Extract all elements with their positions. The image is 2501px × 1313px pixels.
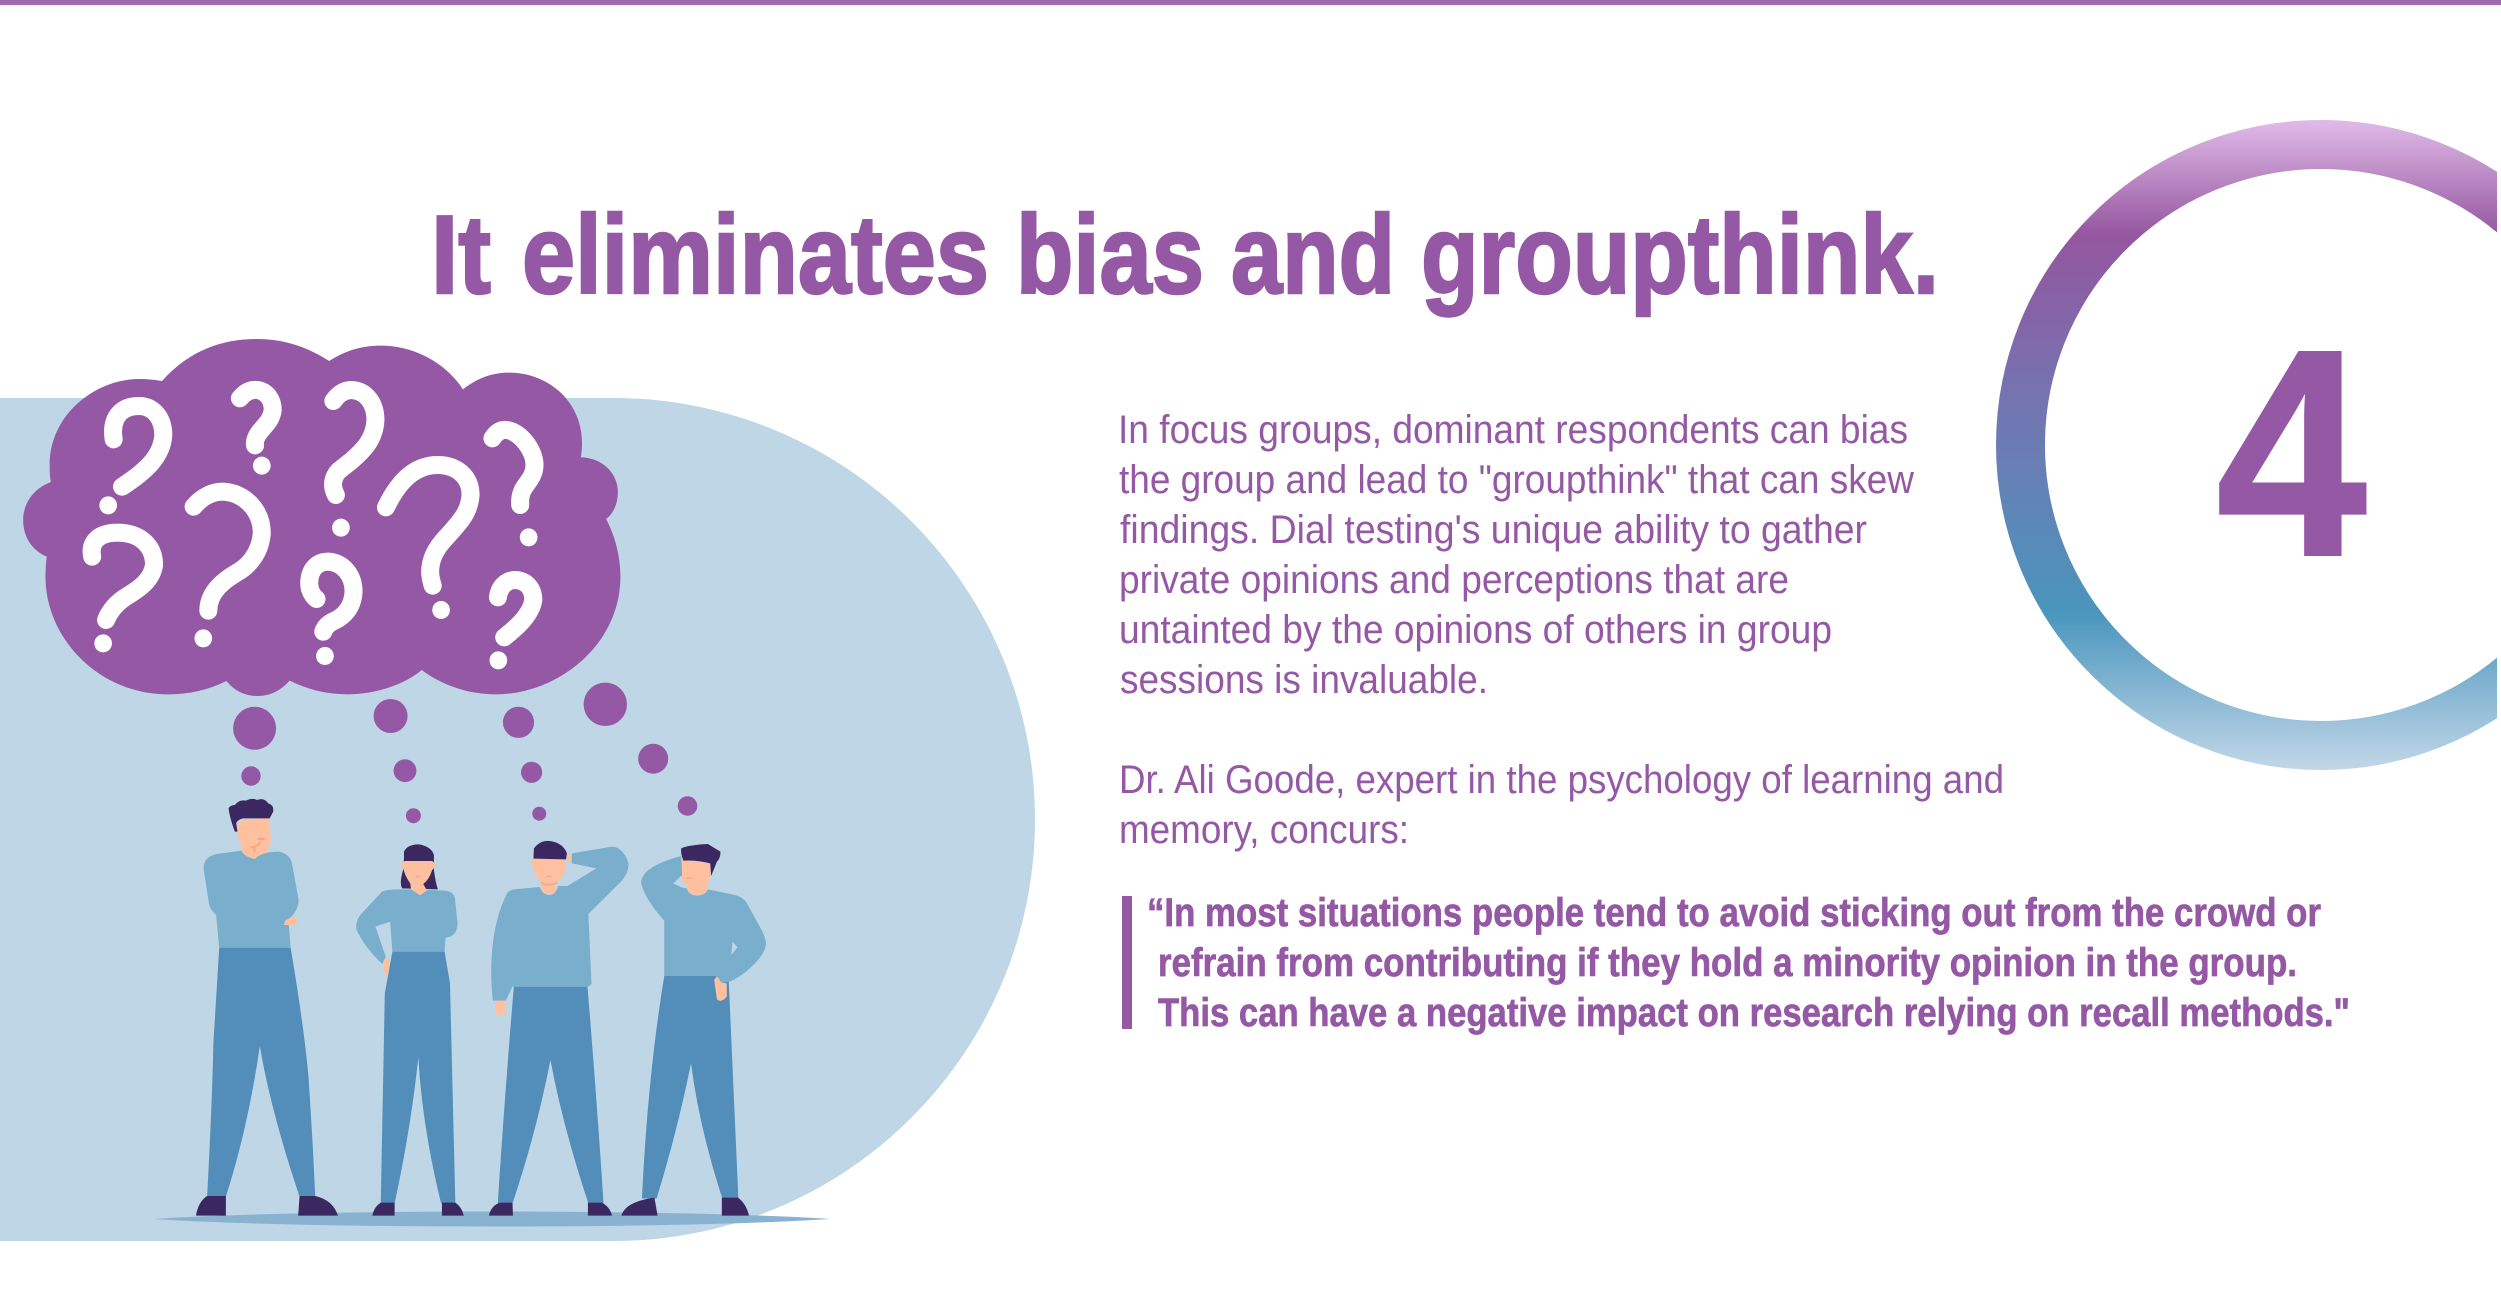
body paragraph [1118,408,1914,702]
number ring [2020,144,2501,746]
body paragraph: sessions is invaluable. [1120,658,1488,702]
body paragraph: private opinions and perceptions that are [1119,558,1789,602]
number 4: 4 [2216,288,2369,618]
question marks [92,390,537,669]
cloud shape [23,339,620,696]
body paragraph: untainted by the opinions of others in group [1119,608,1832,652]
title: and [1231,193,1395,317]
title: groupthink. [1421,193,1939,317]
body paragraph: the group and lead to "groupthink" that can skew [1119,458,1914,502]
title: It [431,193,491,317]
body paragraph: findings. Dial testing's unique ability to gather [1120,508,1867,552]
person 4 [621,844,766,1216]
attribution paragraph [1119,758,2004,852]
title: bias [1016,193,1204,317]
attribution paragraph: memory, concurs: [1119,808,1409,852]
quote text: “In most situations people tend to avoid sticking out from the crowd or [1147,891,2321,935]
thought bubbles [233,683,697,823]
title: eliminates [522,193,989,317]
quote text: refrain from contributing if they hold a minority opinion in the group. [1158,941,2297,985]
attribution paragraph: Dr. Ali Goode, expert in the psychology of learning and [1119,758,2004,802]
quote bar [1122,896,1132,1029]
background blue rounded panel [0,398,1035,1241]
body paragraph: In focus groups, dominant respondents can bias [1118,408,1908,452]
person 3 [489,841,629,1216]
ground shadow [154,1212,830,1226]
top accent bar [0,0,2501,5]
person 2 [356,844,464,1216]
quote text [1147,891,2350,1035]
quote text: This can have a negative impact on research relying on recall methods." [1158,991,2350,1035]
thought cloud with question marks [23,339,620,696]
person 1 [196,799,338,1216]
group of thinking people [196,799,766,1216]
title [431,193,1939,317]
